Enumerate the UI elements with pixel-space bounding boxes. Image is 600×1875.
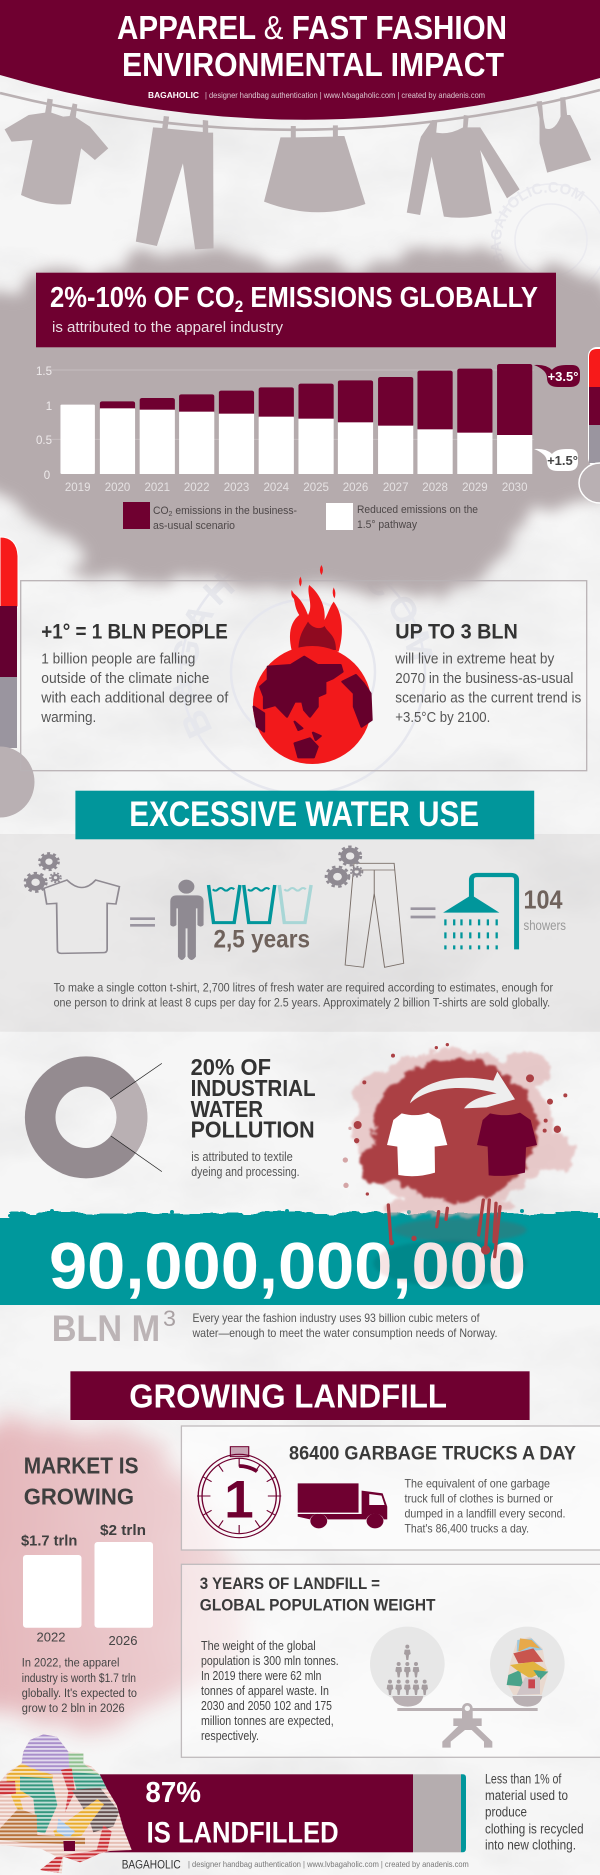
icon: stopwatch: 1 xyxy=(224,1470,254,1530)
band: 87 percent landfilled xyxy=(100,1774,466,1852)
banner shape xyxy=(0,0,600,120)
heading: excessive water use xyxy=(75,791,534,839)
text: dyeing xyxy=(191,1150,300,1179)
heading xyxy=(200,1575,436,1614)
big number: 90,000,000,000 xyxy=(49,1228,526,1302)
footer credit xyxy=(122,1859,469,1872)
x axis labels: 2022 xyxy=(184,482,209,494)
label: 104 showers: 104 xyxy=(524,884,563,914)
heading: growing landfill xyxy=(70,1371,530,1420)
text: dyeing: dyeing and processing. xyxy=(191,1165,300,1179)
text: up to 3 billion xyxy=(394,620,581,726)
x axis labels: 2020 xyxy=(105,482,130,494)
scale pans, beam and stand xyxy=(392,1696,542,1748)
label: billion cubic metres: BLN M xyxy=(52,1308,160,1349)
x axis labels: 2028 xyxy=(422,482,448,494)
band: 87 percent landfilled: IS LANDFILLED xyxy=(147,1816,339,1850)
heading: 2%-10% OF CO xyxy=(50,282,256,314)
clothesline with hanging clothes xyxy=(0,90,600,249)
people pyramid xyxy=(387,1645,428,1695)
dye splash with shirts xyxy=(343,1043,575,1217)
icons: water glasses xyxy=(209,885,311,923)
donut chart: 20 percent xyxy=(25,1056,162,1178)
watermark stamp: large xyxy=(174,582,433,790)
callout: +3.5 degrees xyxy=(534,365,580,387)
heading: 20 percent industrial water pollution: WATER xyxy=(191,1096,263,1122)
equals sign xyxy=(130,919,155,925)
heading: 86400 GARBAGE TRUCKS A DAY xyxy=(289,1442,576,1464)
globe xyxy=(253,646,372,764)
text: Norway water use xyxy=(192,1311,498,1340)
legend: business as usual: 2 xyxy=(169,509,172,518)
x axis labels: 2030 xyxy=(502,482,527,494)
text: trucks explanation: The equivalent of one garbage xyxy=(404,1477,550,1491)
text: dyeing: is attributed to textile xyxy=(191,1150,293,1164)
bar chart: emissions 2019–2030 xyxy=(36,364,534,494)
bar chart: market size xyxy=(21,1522,153,1648)
text: weight explanation: population is 300 mln tonnes. xyxy=(201,1654,339,1668)
text: Norway water use: water—enough to meet the water consumption needs of Norway. xyxy=(192,1326,498,1340)
text: less than 1 percent recycled: material used to xyxy=(485,1788,568,1803)
x axis labels: 2027 xyxy=(383,482,408,494)
callout: +1.5 degrees: +1.5° xyxy=(547,453,578,468)
credit line: BAGAHOLIC xyxy=(148,90,199,100)
text: up to 3 billion: UP TO 3 BLN xyxy=(395,620,518,644)
legend: 1.5 pathway: Reduced emissions on the xyxy=(357,504,478,516)
band: water section background xyxy=(0,834,600,1032)
heading: 20 percent industrial water pollution: INDUSTRIAL xyxy=(191,1075,316,1101)
text: water explanation xyxy=(54,980,553,1010)
text: up to 3 billion: 2070 in the business-as-usual xyxy=(395,671,573,687)
smoke cloud behind the emissions chart xyxy=(0,250,600,598)
heading: 20 percent industrial water pollution: 20% OF xyxy=(191,1054,271,1080)
icon: skirt xyxy=(264,125,365,212)
watermark stamp: large: BAGAHOLIC.COM xyxy=(174,582,433,738)
label: 104 showers xyxy=(524,884,566,933)
header banner xyxy=(0,0,600,120)
heading: MARKET IS xyxy=(24,1452,139,1478)
paint splash xyxy=(343,1043,575,1217)
subheading: is attributed to the apparel industry xyxy=(52,319,283,336)
icon: t-shirt outline xyxy=(25,853,119,953)
y axis labels: 0 xyxy=(44,470,50,482)
title: ENVIRONMENTAL IMPACT xyxy=(122,46,504,83)
text: 1 billion people: outside of the climate niche xyxy=(41,671,209,687)
text: trucks explanation: That's 86,400 trucks a day. xyxy=(404,1522,529,1536)
text: weight explanation: The weight of the global xyxy=(201,1639,316,1653)
credit line: | designer handbag authentication | www.lvbagaholic.com | created by anadenis.com xyxy=(205,90,485,100)
water footprint infographic xyxy=(25,847,566,1010)
y axis labels: 0.5 xyxy=(36,435,52,447)
pollution section xyxy=(25,1054,316,1179)
icon: curved arrow xyxy=(410,1072,515,1108)
text: market explanation: industry is worth $1.7 trln xyxy=(22,1671,136,1685)
heading: excessive water use: EXCESSIVE WATER USE xyxy=(129,795,479,834)
text: less than 1 percent recycled: Less than 1% of xyxy=(485,1772,562,1786)
text: less than 1 percent recycled: produce xyxy=(485,1805,527,1820)
title: APPAREL & FAST FASHION xyxy=(117,9,507,46)
text: trucks explanation: truck full of clothes is burned or xyxy=(404,1492,553,1506)
y axis labels: 1 xyxy=(46,401,52,413)
text: 1 billion people: warming. xyxy=(40,710,96,726)
callout: +3.5 degrees: +3.5° xyxy=(548,369,578,384)
title xyxy=(117,9,507,83)
icon: shower xyxy=(443,875,517,949)
x axis labels: 2021 xyxy=(145,482,170,494)
bar chart: market size: $1.7 trln xyxy=(21,1533,77,1550)
burgundy bars xyxy=(100,364,532,437)
x axis labels xyxy=(65,482,527,494)
chart legend xyxy=(123,502,478,532)
text: weight explanation: In 2019 there were 62 mln xyxy=(201,1669,321,1683)
equals sign xyxy=(411,909,435,917)
white bars xyxy=(60,405,532,474)
icon: burning globe xyxy=(253,565,372,764)
bar chart: market size: $2 trln xyxy=(100,1522,146,1539)
text: market explanation: globally. It's expected to xyxy=(22,1686,137,1700)
text: 1 billion people: +1° = 1 BLN PEOPLE xyxy=(41,620,228,644)
heading: 20 percent industrial water pollution: POLLUTION xyxy=(191,1116,315,1142)
panel: 86400 garbage trucks xyxy=(181,1426,600,1550)
text: weight explanation: respectively. xyxy=(201,1729,259,1743)
dye drips into water xyxy=(373,1200,527,1287)
icon: trousers xyxy=(136,116,214,249)
x axis labels: 2023 xyxy=(224,482,249,494)
heading: GROWING xyxy=(24,1484,134,1510)
water droplets xyxy=(50,1209,524,1214)
clothes pile xyxy=(507,1637,548,1695)
watermark stamp: small: BAGAHOLIC.COM xyxy=(491,182,584,251)
pink wash background xyxy=(0,1424,250,1732)
label: billion cubic metres: 3 xyxy=(163,1306,176,1331)
footer credit: | designer handbag authentication | www.lvbagaholic.com | created by anadenis.com xyxy=(188,1859,469,1869)
icon: sweater xyxy=(407,115,520,218)
legend: 1.5 pathway xyxy=(326,503,478,531)
x axis labels: 2029 xyxy=(462,482,488,494)
text: less than 1 percent recycled: clothing is recycled xyxy=(485,1821,584,1836)
text: trucks explanation xyxy=(404,1477,566,1536)
x axis labels: 2026 xyxy=(343,482,368,494)
icon: person xyxy=(170,880,204,960)
text: up to 3 billion: +3.5°C by 2100. xyxy=(395,710,490,726)
text: trucks explanation: dumped in a landfill every second. xyxy=(404,1507,566,1521)
panel: CO2 heading xyxy=(36,273,556,347)
legend: business as usual: CO xyxy=(153,505,170,517)
text: market explanation: In 2022, the apparel xyxy=(22,1656,119,1670)
text: weight explanation: tonnes of apparel waste. In xyxy=(201,1684,329,1698)
heading: EMISSIONS GLOBALLY xyxy=(243,282,538,314)
x axis labels: 2019 xyxy=(65,482,90,494)
text: weight explanation: 2030 and 2050 102 and 175 xyxy=(201,1699,332,1713)
heading: growing landfill: GROWING LANDFILL xyxy=(129,1378,447,1415)
flames xyxy=(290,585,342,652)
callout: +1.5 degrees xyxy=(534,449,578,471)
legend: business as usual: emissions in the business- xyxy=(172,505,297,517)
legend: 1.5 pathway: 1.5° pathway xyxy=(357,519,417,531)
text: up to 3 billion: will live in extreme heat by xyxy=(394,652,555,668)
band: teal water with large number xyxy=(0,1209,600,1305)
icon: right thermometer xyxy=(579,347,600,503)
heading: 20 percent industrial water pollution xyxy=(191,1054,316,1142)
text: 1 billion people xyxy=(40,620,229,726)
text: weight explanation: million tonnes are expected, xyxy=(201,1714,334,1728)
icon: pile of striped clothes xyxy=(0,1732,133,1875)
icon: jeans outline xyxy=(326,847,404,967)
y axis labels xyxy=(36,366,52,482)
text: 1 billion people: with each additional degree of xyxy=(40,690,229,706)
label: 2.5 years: 2,5 years xyxy=(214,926,310,954)
text: weight explanation xyxy=(201,1639,339,1743)
x axis labels: 2024 xyxy=(264,482,290,494)
heading: 3 YEARS OF LANDFILL = xyxy=(200,1575,380,1593)
legend: business as usual xyxy=(123,502,297,532)
text: up to 3 billion: scenario as the current trend is xyxy=(395,690,581,706)
text: market explanation xyxy=(22,1656,137,1715)
icon: stopwatch xyxy=(197,1447,281,1538)
text: market explanation: grow to 2 bln in 2026 xyxy=(22,1701,125,1715)
icon: left thermometer xyxy=(0,537,34,818)
icon: t-shirt xyxy=(5,99,108,204)
bar chart: market size: 2026 xyxy=(109,1633,137,1648)
text: 1 billion people: 1 billion people are falling xyxy=(41,652,195,668)
footer credit: BAGAHOLIC xyxy=(122,1860,181,1872)
label: 104 showers: showers xyxy=(524,918,566,933)
x axis labels: 2025 xyxy=(303,482,329,494)
heading: 2 xyxy=(235,297,243,316)
panel: climate niche xyxy=(21,581,587,771)
icon: white t-shirt xyxy=(387,1113,447,1176)
icon: balance scale xyxy=(370,1627,565,1748)
bar chart: market size: 2022 xyxy=(37,1630,65,1645)
text: less than 1 percent recycled: into new clothing. xyxy=(485,1838,576,1852)
icon: burgundy t-shirt xyxy=(477,1113,537,1176)
band: 87 percent landfilled: 87% xyxy=(145,1777,201,1809)
continents xyxy=(254,657,372,757)
panel: landfill versus population weight xyxy=(181,1564,600,1757)
heading: GLOBAL POPULATION WEIGHT xyxy=(200,1596,436,1614)
heading xyxy=(24,1452,139,1510)
panel: market growing xyxy=(21,1452,153,1715)
text: less than 1 percent recycled xyxy=(485,1772,584,1852)
text: Norway water use: Every year the fashion industry uses 93 billion cubic meters of xyxy=(192,1311,480,1325)
y axis labels: 1.5 xyxy=(36,366,52,378)
legend: business as usual: as-usual scenario xyxy=(153,520,235,532)
icon: tank top xyxy=(536,97,591,173)
icon: truck xyxy=(298,1483,387,1528)
